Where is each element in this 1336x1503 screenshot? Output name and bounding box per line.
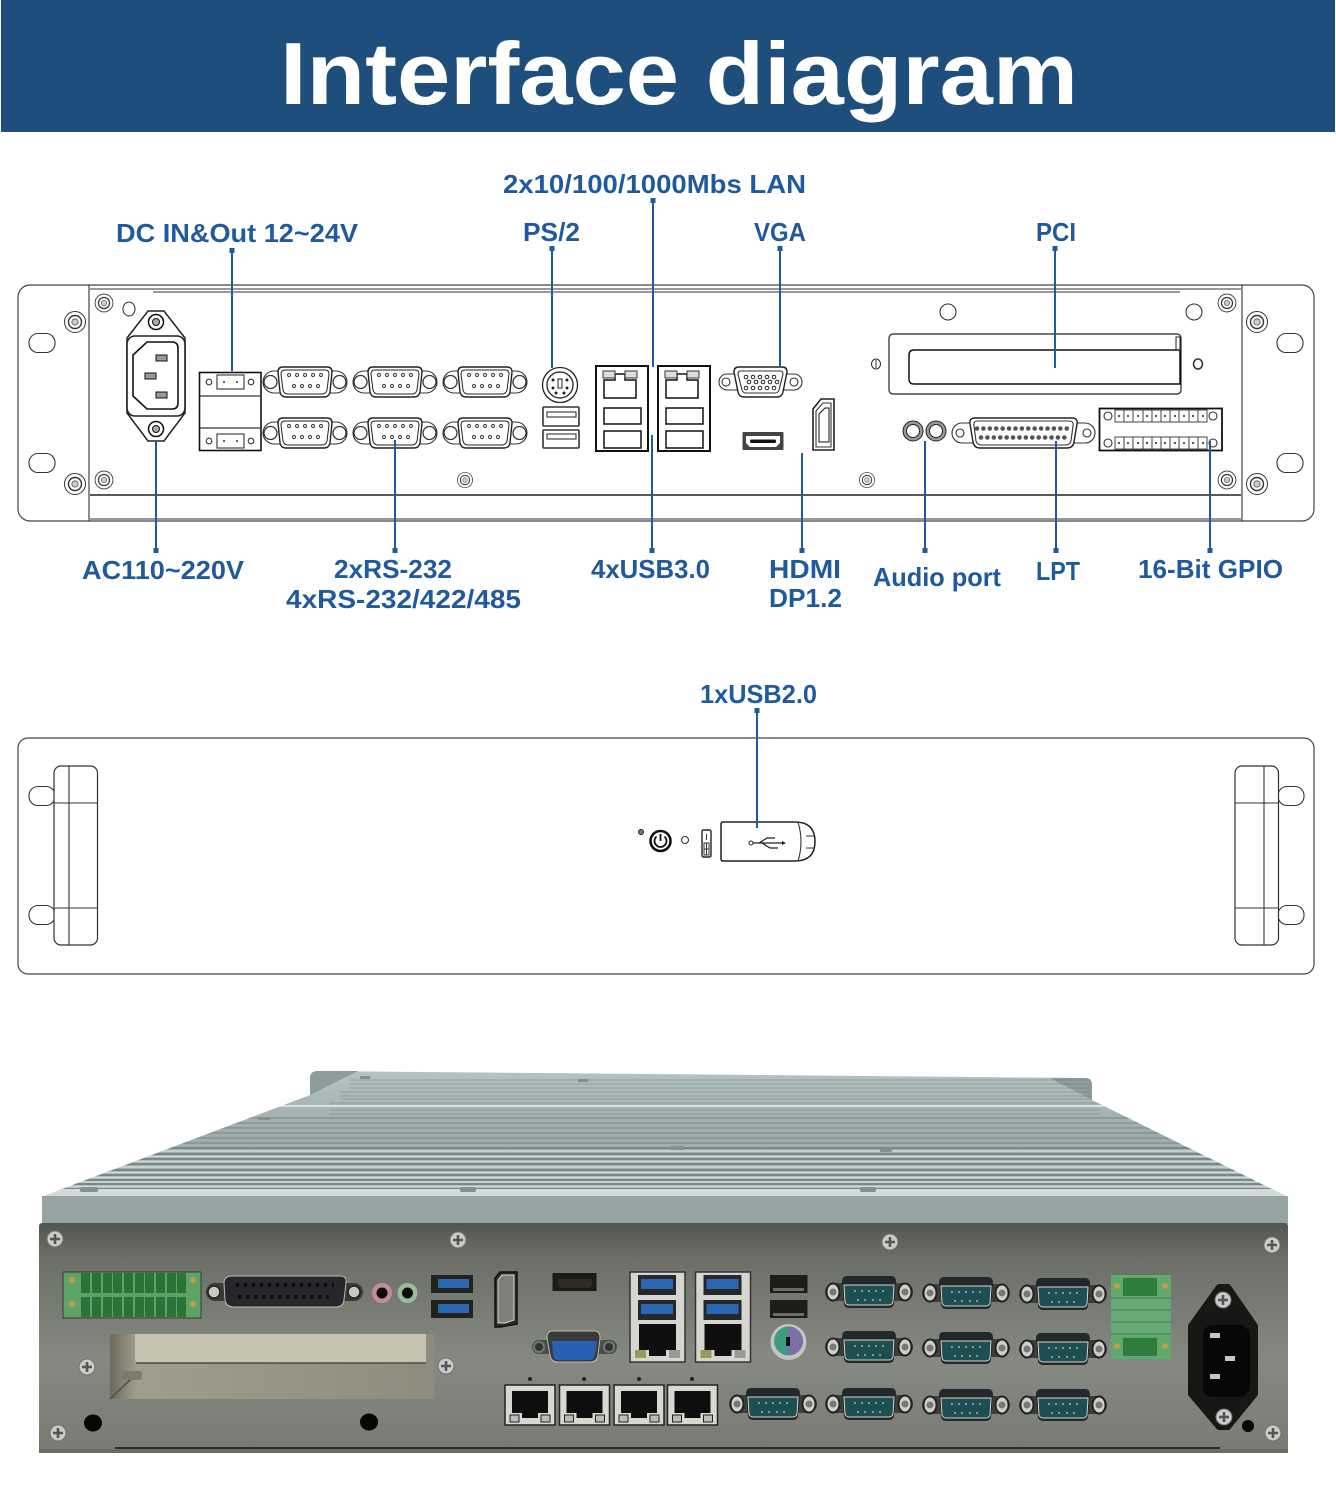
label: HDMI and DP: DP1.2 bbox=[769, 583, 842, 613]
label: RS-232 ports: 2xRS-232 bbox=[334, 554, 452, 584]
LAN ports row photo bbox=[505, 1377, 718, 1425]
label: Audio port: Audio port bbox=[873, 562, 1001, 592]
audio jacks drawing bbox=[903, 421, 946, 441]
LPT port drawing bbox=[952, 418, 1095, 448]
label: 2x10/100/1000Mbs LAN: 2x10/100/1000Mbs LAN bbox=[503, 169, 806, 199]
callout lines: rear interface bbox=[154, 198, 1212, 553]
serial ports photo bbox=[729, 1276, 1107, 1421]
HDMI port drawing bbox=[742, 432, 784, 450]
DisplayPort photo bbox=[495, 1272, 517, 1327]
DC power terminal drawing bbox=[200, 372, 261, 450]
PS/2 port drawing bbox=[542, 368, 578, 402]
PS/2 port photo bbox=[770, 1324, 806, 1360]
indicator and switch bbox=[682, 830, 711, 857]
label: RS-232 ports bbox=[286, 554, 521, 614]
label: VGA: VGA bbox=[754, 217, 806, 247]
LPT port photo bbox=[206, 1276, 363, 1307]
DisplayPort drawing bbox=[813, 399, 834, 450]
VGA port photo bbox=[532, 1331, 617, 1362]
HDMI port photo bbox=[552, 1273, 596, 1291]
serial ports drawing bbox=[263, 367, 527, 448]
label: 1xUSB2.0: 1xUSB2.0 bbox=[700, 679, 817, 709]
title banner: Interface diagram bbox=[280, 24, 1078, 123]
GPIO green terminal bbox=[63, 1272, 201, 1318]
USB2 ports photo bbox=[770, 1275, 808, 1318]
USB3 ports photo bbox=[431, 1275, 473, 1318]
label: 4xUSB3.0: 4xUSB3.0 bbox=[591, 554, 710, 584]
icon: USB 2.0 port bbox=[721, 822, 815, 861]
LAN and USB3 stacks photo bbox=[630, 1272, 750, 1362]
label: HDMI and DP: HDMI bbox=[769, 554, 841, 584]
audio jacks photo bbox=[372, 1283, 418, 1303]
DC power green terminal bbox=[1111, 1275, 1171, 1359]
LAN and USB3 stack drawing bbox=[596, 366, 710, 451]
icon: power button bbox=[638, 830, 670, 851]
chassis rear face bbox=[39, 1223, 1288, 1453]
title banner bbox=[1, 0, 1335, 132]
16-bit GPIO terminal drawing bbox=[1100, 408, 1222, 450]
label: 16-Bit GPIO: 16-Bit GPIO bbox=[1138, 554, 1283, 584]
label: AC110~220V: AC110~220V bbox=[82, 555, 245, 585]
AC power inlet drawing bbox=[127, 311, 185, 441]
panel: front line drawing bbox=[18, 738, 1314, 974]
label: HDMI and DP bbox=[769, 554, 842, 613]
label: DC IN&Out 12~24V: DC IN&Out 12~24V bbox=[116, 218, 359, 248]
label: PS/2: PS/2 bbox=[523, 217, 580, 247]
heat sink top bbox=[0, 1071, 1336, 1224]
right handle bbox=[1235, 766, 1304, 945]
label: LPT: LPT bbox=[1036, 556, 1080, 586]
PCI slot photo bbox=[110, 1334, 434, 1399]
AC power inlet photo bbox=[1191, 1287, 1255, 1432]
label: PCI: PCI bbox=[1036, 217, 1076, 247]
VGA port drawing bbox=[719, 367, 802, 397]
label: RS-232 ports: 4xRS-232/422/485 bbox=[286, 584, 521, 614]
panel: rear interface line drawing bbox=[18, 285, 1314, 521]
USB ports drawing bbox=[543, 407, 579, 448]
callout line: USB 2.0 bbox=[754, 708, 760, 828]
PCI slot drawing bbox=[872, 334, 1202, 394]
left handle bbox=[29, 766, 98, 945]
panel: product photo bbox=[0, 1071, 1336, 1453]
